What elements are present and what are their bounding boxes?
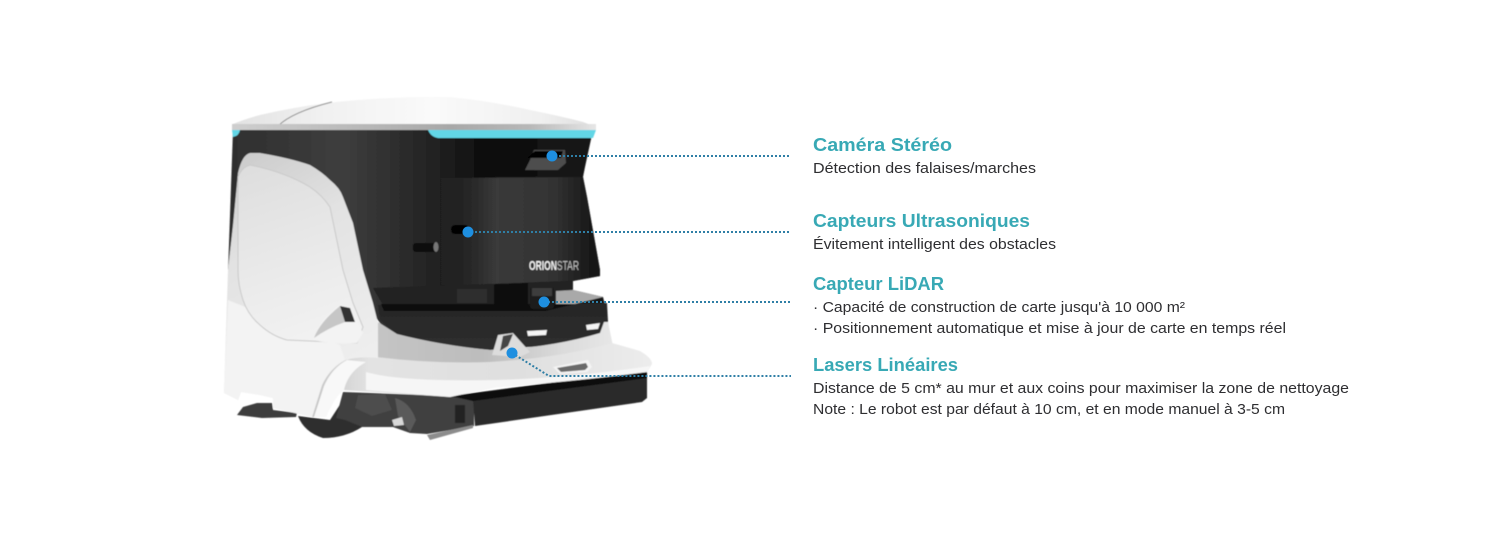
robot illustration bbox=[224, 97, 652, 440]
heading: lasers: Lasers Linéaires bbox=[813, 354, 958, 375]
side sensor bbox=[313, 305, 363, 344]
description: lasers line 2: Note : Le robot est par défaut à 10 cm, et en mode manuel à 3-5 cm bbox=[813, 402, 1285, 418]
description: lidar line 1: · Capacité de construction de carte jusqu'à 10 000 m² bbox=[813, 300, 1185, 316]
lidar cylinder bbox=[530, 287, 554, 309]
slot opening bbox=[557, 363, 588, 372]
dark upper body bbox=[228, 130, 609, 350]
marker: ultrasonic bbox=[462, 226, 474, 238]
marker: camera bbox=[546, 150, 558, 162]
callout line: lidar bbox=[544, 301, 791, 303]
lower dark section bbox=[378, 303, 609, 350]
marker: lidar bbox=[538, 296, 550, 308]
black bumper bbox=[473, 377, 647, 426]
cyan light right bbox=[428, 130, 596, 138]
logo: ORIONSTAR bbox=[529, 258, 579, 273]
central collar bbox=[440, 177, 600, 286]
bumper shadow bbox=[450, 370, 647, 401]
description: lidar line 2: · Positionnement automatique et mise à jour de carte en temps réel bbox=[813, 321, 1286, 337]
light ring below dark section bbox=[376, 322, 613, 366]
cyan light left bbox=[232, 130, 240, 137]
description: stereo camera: Détection des falaises/marches bbox=[813, 161, 1036, 177]
skirt slot bbox=[553, 360, 592, 374]
brush mechanism bbox=[336, 392, 474, 434]
side panel bbox=[238, 165, 363, 343]
grey lidar plate bbox=[556, 290, 603, 304]
wheel bbox=[298, 400, 368, 438]
heading: stereo camera: Caméra Stéréo bbox=[813, 134, 952, 155]
fender highlight bbox=[314, 360, 366, 417]
callout line: lasers bbox=[512, 353, 791, 376]
shell lower highlight bbox=[224, 300, 345, 417]
block: ultrasonic bbox=[813, 210, 1056, 253]
callout line: camera bbox=[551, 155, 791, 157]
block: lasers bbox=[813, 354, 1349, 418]
shelf around lidar bbox=[373, 281, 573, 305]
block: lidar bbox=[813, 273, 1286, 337]
mechanism details bbox=[355, 394, 465, 432]
marker: lasers bbox=[506, 348, 518, 358]
front sensor housing bbox=[492, 333, 530, 357]
ultrasonic sensors bbox=[413, 225, 469, 252]
dome top bbox=[233, 97, 596, 127]
stereo camera bbox=[525, 150, 566, 170]
block: stereo camera bbox=[813, 134, 1036, 177]
description: lasers line 1: Distance de 5 cm* au mur et aux coins pour maximiser la zone de nettoyage bbox=[813, 381, 1349, 397]
shelf shadow bbox=[381, 304, 575, 311]
front skirt plate bbox=[312, 343, 652, 417]
skirt rim bbox=[366, 366, 650, 397]
heading: lidar: Capteur LiDAR bbox=[813, 273, 944, 294]
callout line: ultrasonic bbox=[467, 231, 791, 233]
dome seam bbox=[278, 102, 332, 126]
grey band bbox=[232, 124, 596, 130]
side brush bristles bbox=[427, 425, 473, 440]
white side shell bbox=[224, 153, 378, 417]
description: ultrasonic: Évitement intelligent des obstacles bbox=[813, 236, 1056, 253]
heading: ultrasonic: Capteurs Ultrasoniques bbox=[813, 210, 1030, 231]
window lights bbox=[527, 323, 600, 336]
front foot bbox=[237, 403, 297, 418]
